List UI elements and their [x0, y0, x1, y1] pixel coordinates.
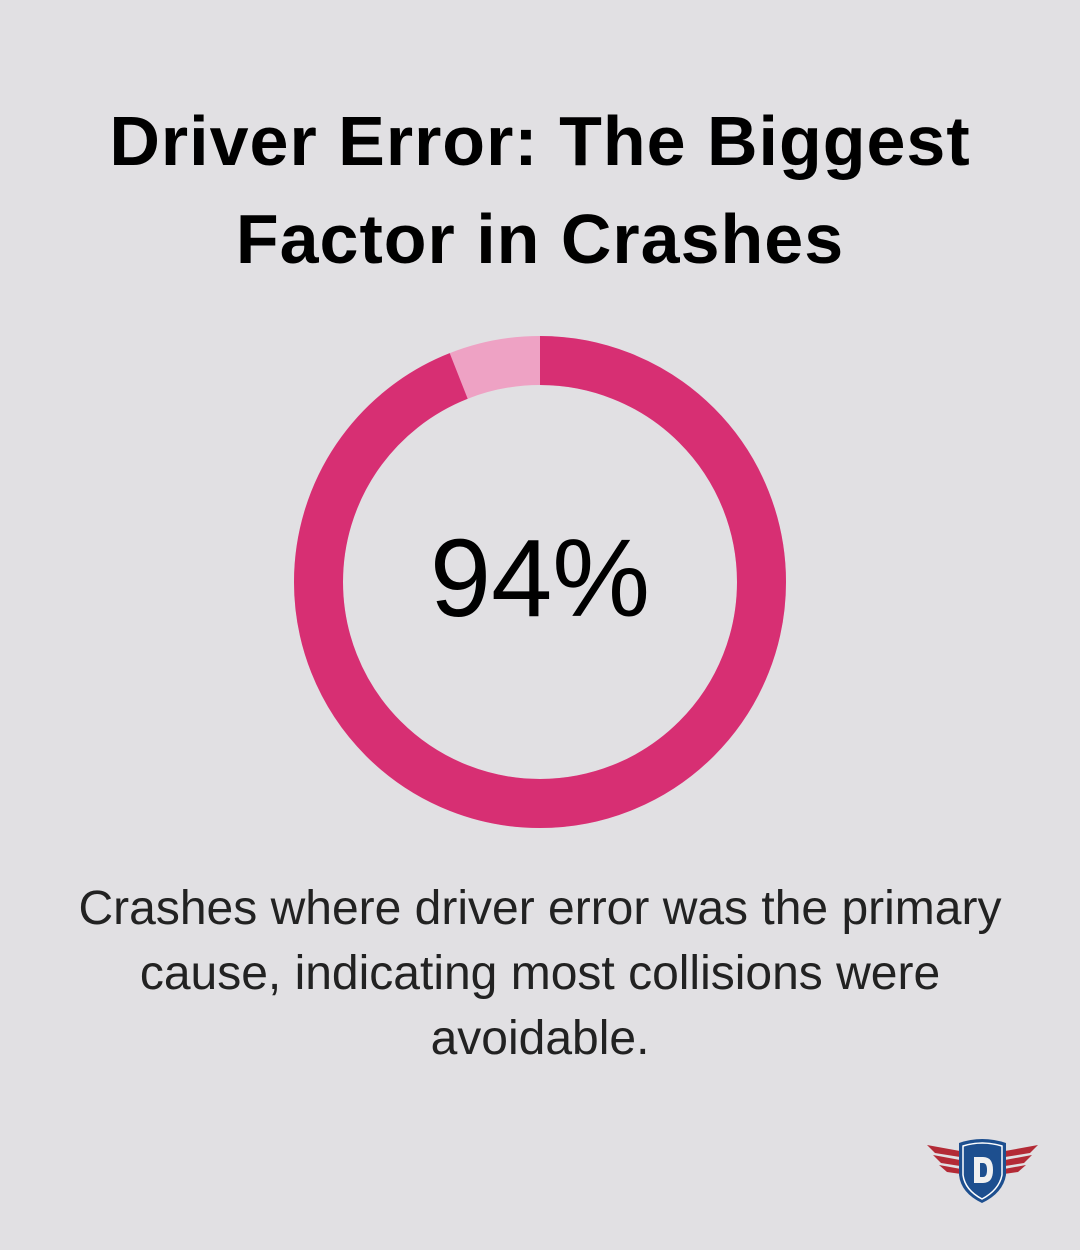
- description text: avoidable.: [431, 1012, 649, 1065]
- description text: cause, indicating most collisions were: [140, 947, 940, 1000]
- donut chart: 94%: [430, 517, 650, 640]
- description text: [79, 882, 1002, 1065]
- title: Factor in Crashes: [236, 200, 844, 278]
- icon: logo shield: [927, 1139, 1038, 1203]
- title: Driver Error: The Biggest: [109, 102, 971, 180]
- description text: Crashes where driver error was the primary: [79, 882, 1001, 935]
- title: [109, 102, 971, 278]
